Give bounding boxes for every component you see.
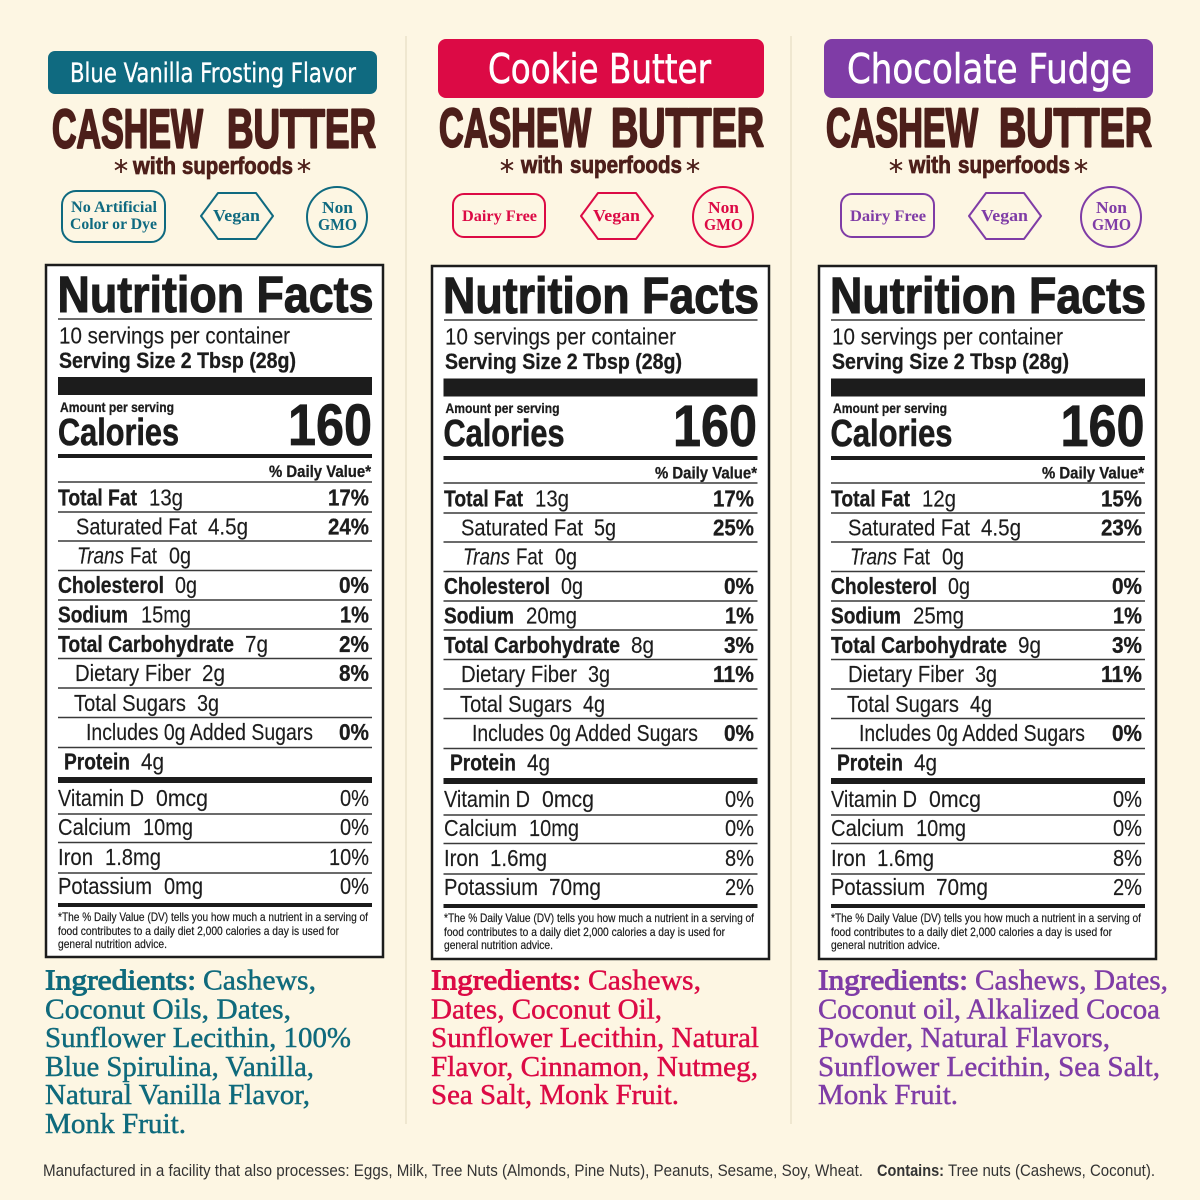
nutrient rows [831,486,1145,908]
nutrient rows: 8% [339,660,369,686]
servings [831,320,1145,396]
allergen footer: Manufactured in a facility that also processes: Eggs, Milk, Tree Nuts (Almonds, Pine Nuts), Peanuts, Sesame, Soy, Wheat. [43,1161,863,1180]
nutrient rows: 0mg [164,873,203,899]
nutrient rows: Cholesterol [831,573,937,599]
nutrient rows: 4g [141,748,164,774]
calories: 160 [288,393,372,458]
nutrient rows: 0mcg [156,785,208,811]
footnote: *The % Daily Value (DV) tells you how much a nutrient in a serving of [831,911,1142,925]
badge: no artificial color or dye [62,191,165,242]
ingredients: Sea Salt, Monk Fruit. [431,1079,679,1111]
nutrient rows: 0% [339,572,369,598]
ingredients: Blue Spirulina, Vanilla, [45,1051,314,1083]
nutrient rows: 4.5g [208,514,248,540]
nutrient rows: 3g [197,690,219,716]
nutrient rows: 0% [340,785,369,811]
calories [444,394,758,483]
nutrient rows: Vitamin D [58,785,144,811]
nutrient rows: Vitamin D [831,786,917,812]
nutrient rows: Protein [837,750,903,776]
nutrient rows: Iron [444,845,479,871]
nutrient rows: Dietary Fiber [848,661,964,687]
nutrient rows: 0g [942,544,964,570]
nutrient rows: 0% [340,814,369,840]
badge: vegan [581,193,653,239]
badge: vegan [969,193,1041,239]
subheading: with superfoods: with [908,152,951,179]
ingredients: Dates, Coconut Oil, [431,994,662,1026]
nutrient rows: 0% [724,720,754,746]
nutrient rows: Protein [64,748,130,774]
calories: % Daily Value* [1042,464,1144,482]
flavor banner [438,39,764,98]
heading: cashew butter: CASHEW [439,96,591,158]
nutrient rows: 4g [914,750,937,776]
subheading: with superfoods [501,152,699,179]
nutrient rows: 11% [1101,661,1142,687]
panel title: Nutrition Facts [58,266,374,323]
heading: cashew butter: CASHEW [52,98,203,160]
nutrient rows: 25mg [913,602,964,628]
flavor banner: Chocolate Fudge [847,45,1132,93]
nutrient rows: 0% [1113,786,1142,812]
ingredients: Monk Fruit. [45,1108,186,1140]
nutrient rows: Cholesterol [444,573,550,599]
nutrient rows: 8% [725,845,754,871]
nutrient rows: Sodium [58,602,128,628]
nutrient rows: 15% [1101,486,1142,512]
badge: dairy free: Dairy Free [462,208,537,225]
nutrient rows: 0mcg [929,786,981,812]
nutrient rows: 0% [725,815,754,841]
ingredients: Coconut Oils, Dates, [45,994,291,1026]
nutrient rows: 2% [1113,874,1142,900]
nutrient rows: Includes 0g Added Sugars [86,719,313,745]
nutrient rows: Fat [130,542,157,568]
flavor banner [48,51,377,94]
flavor banner: Cookie Butter [488,45,711,93]
badge: non gmo [693,187,753,247]
ingredients [818,964,1168,1111]
nutrient rows: 4g [527,750,550,776]
ingredients: Cashews, [203,964,316,996]
product column: Chocolate Fudge [818,39,1168,1111]
badge: dairy free [453,194,545,237]
nutrient rows: Includes 0g Added Sugars [859,720,1085,746]
nutrient rows: Sodium [831,602,901,628]
nutrient rows: Total Sugars [74,690,186,716]
calories: Calories [830,413,952,455]
ingredients: Ingredients: [45,964,196,996]
nutrient rows: Total Sugars [847,691,959,717]
product column: Cookie Butter [431,39,769,1111]
calories: % Daily Value* [655,464,757,482]
nutrient rows: 3g [975,661,997,687]
nutrient rows: 0g [561,573,583,599]
nutrient rows: Total Carbohydrate [831,632,1007,658]
nutrition facts panel [819,266,1156,959]
badge: vegan: Vegan [213,206,261,225]
ingredients: Ingredients: [818,964,968,996]
panel title: Nutrition Facts [443,267,759,324]
calories: Amount per serving [60,399,174,415]
ingredients: Cashews, Dates, [975,964,1168,996]
footnote: general nutrition advice. [831,938,940,952]
nutrient rows: 0mcg [542,786,594,812]
nutrient rows: 2g [202,660,225,686]
heading: cashew butter: BUTTER [611,96,764,158]
calories: Calories [58,412,179,454]
footnote [831,911,1142,952]
badge: non gmo [1081,187,1141,247]
nutrient rows: 1.8mg [105,844,161,870]
nutrient rows: Potassium [58,873,152,899]
nutrient rows: 4g [583,691,605,717]
footnote [58,910,369,951]
subheading: with superfoods: with [520,152,563,179]
flavor banner: Blue Vanilla Frosting Flavor [70,58,357,89]
nutrient rows: Dietary Fiber [75,660,191,686]
servings [58,319,372,395]
nutrient rows: 5g [594,514,616,540]
ingredients: Sunflower Lecithin, Sea Salt, [818,1051,1160,1083]
badge: vegan: Vegan [593,206,641,225]
nutrient rows: 70mg [549,874,601,900]
servings: Serving Size 2 Tbsp (28g) [445,349,682,374]
nutrient rows: Total Fat [58,484,137,510]
allergen footer: Contains: [877,1161,944,1180]
nutrient rows: Total Carbohydrate [58,631,234,657]
nutrient rows: 17% [713,486,754,512]
nutrient rows: Calcium [58,814,131,840]
badge: non gmo: Non [708,198,740,217]
nutrient rows: 0% [339,719,369,745]
footnote: general nutrition advice. [58,937,167,951]
nutrient rows: 0% [340,873,369,899]
nutrient rows: 3% [724,632,754,658]
footnote: food contributes to a daily diet 2,000 calories a day is used for [831,925,1112,939]
badge: non gmo [307,187,367,247]
nutrient rows: 8g [631,632,654,658]
badge: non gmo: Non [1096,198,1128,217]
flavor banner [824,39,1153,98]
ingredients: Sunflower Lecithin, Natural [431,1022,759,1054]
calories: % Daily Value* [269,462,371,481]
nutrient rows: 0g [555,544,577,570]
nutrient rows: Total Fat [831,486,910,512]
footnote: general nutrition advice. [444,938,553,952]
nutrient rows: Trans [463,544,510,570]
badge: non gmo: GMO [318,215,357,234]
nutrient rows: Saturated Fat [76,514,198,540]
nutrient rows: 0% [724,573,754,599]
nutrient rows: 1.6mg [877,845,934,871]
badge: no artificial color or dye: Color or Dye [70,216,157,233]
subheading: with superfoods: superfoods [182,153,293,180]
footnote: *The % Daily Value (DV) tells you how much a nutrient in a serving of [58,910,369,924]
nutrient rows: 1% [340,602,369,628]
nutrient rows: 24% [328,514,369,540]
nutrient rows: 0g [175,572,197,598]
calories [830,394,1145,483]
badge: non gmo: Non [322,198,354,217]
nutrient rows: Includes 0g Added Sugars [472,720,698,746]
nutrient rows: 17% [328,484,369,510]
nutrient rows: 0% [1112,573,1142,599]
ingredients: Cashews, [588,964,701,996]
heading: cashew butter: CASHEW [826,96,978,158]
nutrient rows: 25% [713,514,754,540]
nutrient rows: Dietary Fiber [461,661,577,687]
nutrient rows: 12g [922,486,956,512]
nutrient rows: 11% [713,661,754,687]
nutrient rows: 10% [329,844,369,870]
nutrient rows: 1.6mg [490,845,547,871]
ingredients: Powder, Natural Flavors, [818,1022,1110,1054]
ingredients: Monk Fruit. [818,1079,958,1111]
nutrient rows: 2% [339,631,369,657]
calories: Amount per serving [833,400,947,416]
nutrient rows: Total Carbohydrate [444,632,620,658]
nutrient rows: Protein [450,750,516,776]
badge: dairy free [841,194,934,237]
nutrition facts panel [46,265,383,957]
nutrient rows [58,484,372,907]
nutrient rows: 70mg [936,874,988,900]
ingredients [431,964,759,1111]
nutrient rows: 0% [725,786,754,812]
badge: no artificial color or dye: No Artificial [71,199,158,216]
nutrient rows: Trans [77,542,124,568]
footnote: food contributes to a daily diet 2,000 calories a day is used for [444,925,725,939]
ingredients: Coconut oil, Alkalized Cocoa [818,994,1160,1026]
servings [444,320,758,396]
nutrient rows: 23% [1101,514,1142,540]
footnote [444,911,755,952]
calories: 160 [673,394,757,459]
nutrient rows: 0g [948,573,970,599]
nutrient rows: 9g [1018,632,1041,658]
calories: 160 [1060,394,1144,459]
nutrient rows: 0g [169,542,191,568]
nutrient rows: Saturated Fat [848,514,971,540]
nutrient rows: Fat [903,544,930,570]
nutrient rows: Total Fat [444,486,523,512]
nutrient rows: 13g [149,484,183,510]
product column: Blue Vanilla Frosting Flavor [45,51,383,1140]
servings: Serving Size 2 Tbsp (28g) [832,349,1069,374]
ingredients [45,964,351,1140]
ingredients: Sunflower Lecithin, 100% [45,1022,351,1054]
nutrient rows: 0% [1113,815,1142,841]
nutrient rows [444,486,758,908]
nutrient rows: Vitamin D [444,786,530,812]
nutrient rows: 7g [245,631,268,657]
nutrient rows: 4.5g [981,514,1021,540]
nutrient rows: 3% [1112,632,1142,658]
calories: Calories [444,413,564,455]
badge: non gmo: GMO [704,215,743,234]
footnote: *The % Daily Value (DV) tells you how much a nutrient in a serving of [444,911,755,925]
nutrient rows: Cholesterol [58,572,164,598]
nutrient rows: 10mg [916,815,966,841]
nutrient rows: 1% [725,602,754,628]
servings: Serving Size 2 Tbsp (28g) [59,348,296,373]
servings: 10 servings per container [445,324,676,350]
subheading: with superfoods: superfoods [570,152,682,179]
panel title: Nutrition Facts [830,267,1146,324]
nutrient rows: Calcium [831,815,904,841]
nutrient rows: 10mg [529,815,579,841]
subheading: with superfoods: superfoods [958,152,1070,179]
calories: Amount per serving [446,400,560,416]
servings: 10 servings per container [832,324,1063,350]
nutrient rows: 1% [1113,602,1142,628]
nutrient rows: Trans [850,544,897,570]
servings: 10 servings per container [59,322,290,348]
ingredients: Ingredients: [431,964,581,996]
nutrient rows: Saturated Fat [461,514,584,540]
nutrient rows: Iron [58,844,93,870]
subheading: with superfoods [890,152,1087,179]
badge: vegan [201,193,273,239]
nutrient rows: 20mg [526,602,577,628]
heading: cashew butter: BUTTER [227,98,376,160]
subheading: with superfoods: with [132,153,176,180]
nutrition facts panel [432,266,769,959]
nutrient rows: Fat [516,544,543,570]
nutrient rows: Sodium [444,602,514,628]
nutrient rows: 2% [725,874,754,900]
badge: vegan: Vegan [981,206,1029,225]
nutrient rows: 10mg [143,814,193,840]
nutrient rows: Calcium [444,815,517,841]
nutrient rows: 0% [1112,720,1142,746]
nutrient rows: 15mg [141,602,191,628]
badge: non gmo: GMO [1092,215,1131,234]
footnote: food contributes to a daily diet 2,000 calories a day is used for [58,924,339,938]
badge: dairy free: Dairy Free [850,208,926,225]
nutrient rows: 8% [1113,845,1142,871]
calories [58,393,372,482]
ingredients: Flavor, Cinnamon, Nutmeg, [431,1051,758,1083]
nutrient rows: Potassium [444,874,538,900]
nutrient rows: 3g [588,661,610,687]
nutrient rows: 13g [535,486,569,512]
ingredients: Natural Vanilla Flavor, [45,1079,310,1111]
nutrient rows: Total Sugars [460,691,572,717]
nutrient rows: 4g [970,691,992,717]
subheading: with superfoods [115,153,310,180]
nutrient rows: Potassium [831,874,925,900]
allergen footer: Tree nuts (Cashews, Coconut). [948,1161,1155,1180]
nutrient rows: Iron [831,845,866,871]
